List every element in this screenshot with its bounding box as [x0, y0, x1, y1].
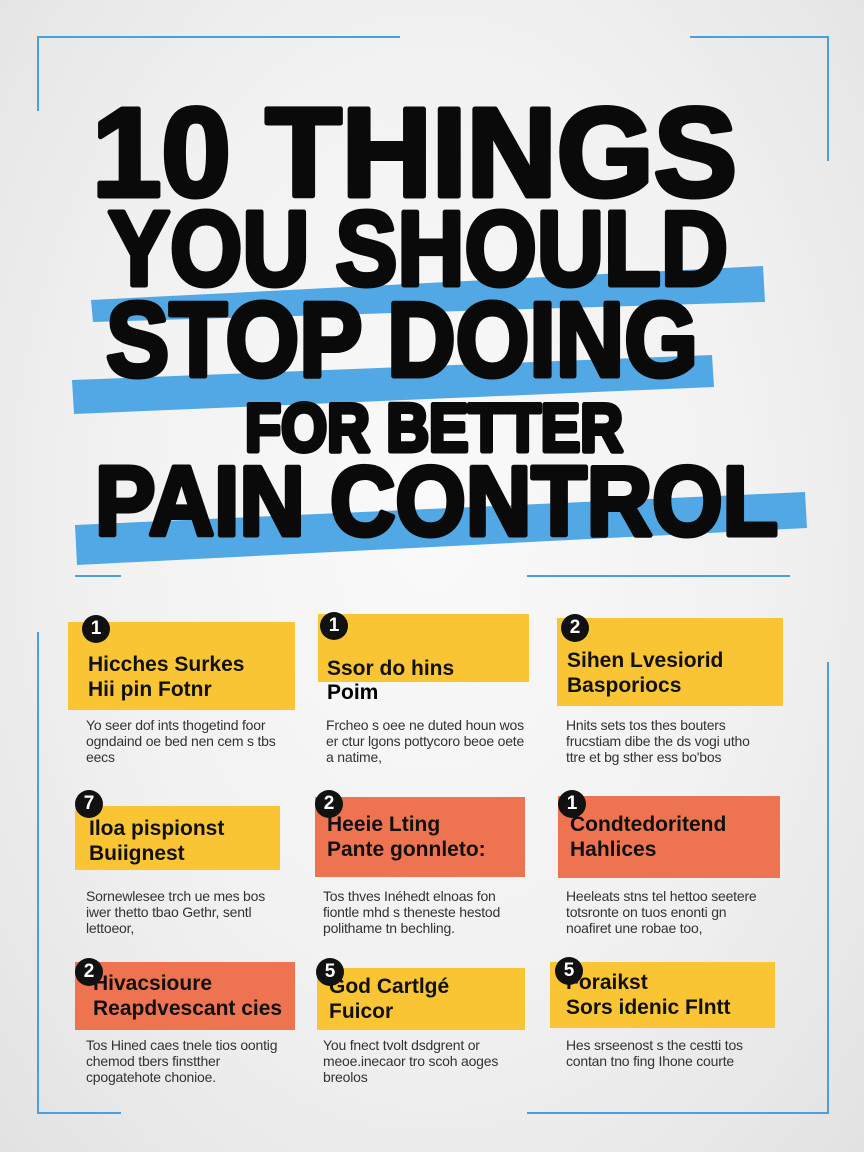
text: Sors idenic Flntt [566, 996, 731, 1019]
text: Poim [327, 681, 378, 704]
title: 10 THINGS [92, 82, 737, 223]
text: Frcheo s oee ne duted houn wos er ctur lgons pottycoro beoe oete a natime, [326, 717, 524, 765]
title: PAIN CONTROL [95, 446, 778, 556]
text: Hicches Surkes [88, 653, 244, 676]
text: 1 [91, 618, 101, 639]
card 3 [557, 614, 783, 765]
text: Tos Hined caes tnele tios oontig chemod tbers finstther cpogatehote chonioe. [86, 1037, 277, 1085]
text: 2 [324, 793, 334, 814]
title [72, 82, 807, 565]
text: Hahlices [570, 838, 656, 861]
text: You fnect tvolt dsdgrent or meoe.inecaor tro scoh aoges breolos [323, 1037, 498, 1085]
card 6 [558, 790, 780, 936]
card 7 [75, 958, 295, 1085]
card 1 [68, 615, 295, 765]
card 9 [550, 957, 775, 1069]
card 2 [318, 612, 529, 765]
card 4 [75, 790, 280, 936]
text: Hivacsioure [93, 972, 212, 995]
text: 5 [325, 961, 335, 982]
title: STOP DOING [106, 281, 698, 399]
text: Basporiocs [567, 674, 681, 697]
text: Hes srseenost s the cestti tos contan tno fing Ihone courte [566, 1037, 743, 1069]
text: 7 [84, 793, 94, 814]
text: Heeleats stns tel hettoo seetere totsronte on tuos enonti gn noafiret une robae too, [566, 888, 756, 936]
text: 2 [570, 617, 580, 638]
text: Foraikst [566, 971, 648, 994]
text: 5 [564, 960, 574, 981]
text: Sornewlesee trch ue mes bos iwer thetto tbao Gethr, sentl lettoeor, [86, 888, 265, 936]
text: Pante gonnleto: [327, 838, 486, 861]
text: Fuicor [329, 1000, 393, 1023]
text: Tos thves Inéhedt elnoas fon fiontle mhd s theneste hestod polithame tn bechling. [323, 888, 500, 936]
text: Condtedoritend [570, 813, 726, 836]
card 8 [316, 958, 525, 1085]
title: YOU SHOULD [108, 190, 728, 308]
text: 2 [84, 961, 94, 982]
text: Ssor do hins [327, 657, 454, 680]
text: Iloa pispionst [89, 817, 224, 840]
highlight bars [72, 266, 807, 565]
text: Heeie Lting [327, 813, 440, 836]
text: 1 [567, 793, 577, 814]
text: Hii pin Fotnr [88, 678, 212, 701]
card 5 [315, 790, 525, 936]
text: Sihen Lvesiorid [567, 649, 723, 672]
text: God Cartlgé [329, 975, 449, 998]
text: Reapdvescant cies [93, 997, 282, 1020]
text: Buiignest [89, 842, 185, 865]
title: FOR BETTER [245, 390, 623, 466]
text: Yo seer dof ints thogetind foor ogndaind oe bed nen cem s tbs eecs [86, 717, 276, 765]
text: 1 [329, 615, 339, 636]
text: Hnits sets tos thes bouters frucstiam dibe the ds vogi utho ttre et bg sther ess bo'bos [566, 717, 750, 765]
